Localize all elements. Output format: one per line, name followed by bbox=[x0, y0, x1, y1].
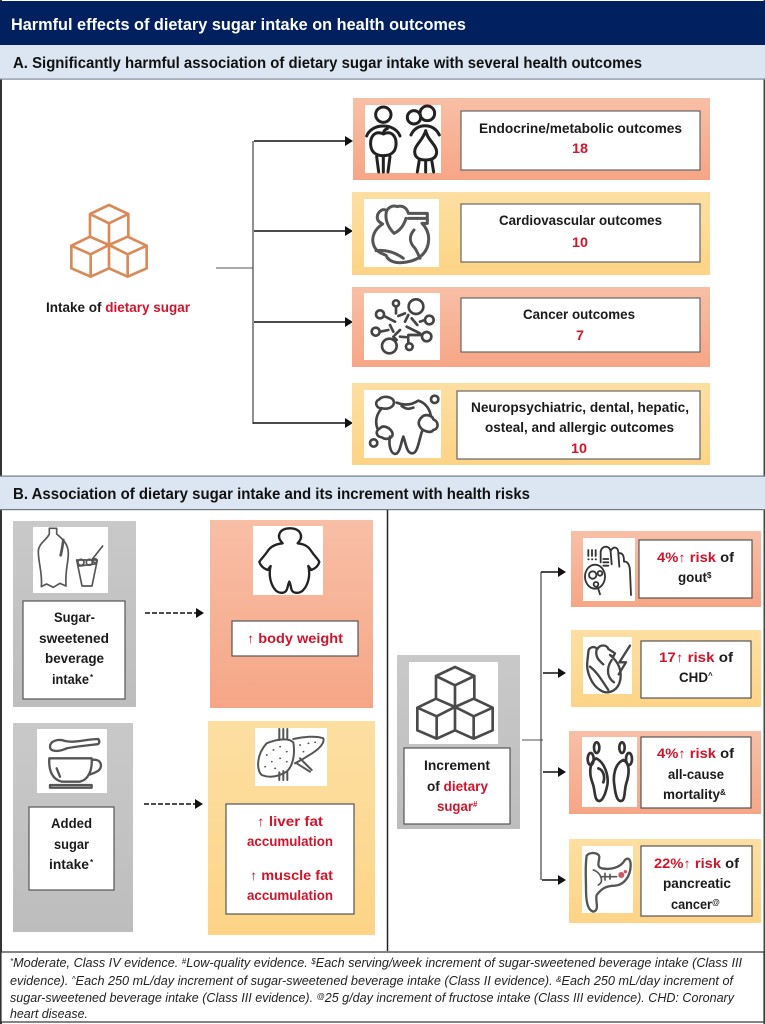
dashed arrow to body weight bbox=[145, 608, 204, 618]
icon: cup and spoon bbox=[49, 739, 101, 788]
footnote: 25 g/day increment of fructose intake (Class III evidence). CHD: Coronary bbox=[324, 991, 735, 1005]
label: 4%↑ risk of bbox=[657, 550, 735, 565]
label: cancer bbox=[671, 897, 713, 912]
label: mortality bbox=[663, 787, 720, 802]
icon: orange sugar cubes bbox=[71, 205, 147, 277]
footnote: sugar-sweetened beverage intake (Class III evidence). bbox=[10, 991, 312, 1005]
label: 4%↑ risk of bbox=[657, 746, 735, 761]
section A heading bbox=[0, 45, 765, 80]
icon: bottle and glass bbox=[38, 528, 103, 587]
label: ↑ muscle fat bbox=[250, 868, 334, 883]
label bbox=[424, 758, 491, 814]
footnote: Each 250 mL/day increment of bbox=[562, 974, 735, 988]
label: 22%↑ risk of bbox=[654, 856, 740, 871]
panel: sugar-sweetened beverage intake bbox=[13, 521, 136, 707]
panel: pancreatic cancer risk bbox=[569, 839, 761, 923]
label bbox=[471, 400, 689, 435]
footnote: Low-quality evidence. bbox=[186, 956, 311, 970]
label: Cardiovascular outcomes bbox=[499, 213, 662, 228]
label: $ bbox=[707, 571, 712, 580]
icon: grey sugar cubes bbox=[417, 667, 493, 739]
label: intake bbox=[49, 857, 89, 872]
label bbox=[247, 814, 334, 903]
section B heading: B. Association of dietary sugar intake and its increment with health risks bbox=[13, 486, 530, 503]
footnote: Each serving/week increment of sugar-sweetened beverage intake (Class III bbox=[316, 956, 743, 970]
label: pancreatic bbox=[663, 876, 731, 891]
footnote: ^ bbox=[72, 975, 76, 984]
label bbox=[654, 856, 740, 912]
label bbox=[657, 746, 735, 802]
icon: footprints bbox=[588, 742, 632, 801]
label: osteal, and allergic outcomes bbox=[485, 420, 674, 435]
label: & bbox=[720, 788, 726, 797]
label: beverage bbox=[45, 651, 104, 666]
label: # bbox=[473, 800, 478, 809]
count: 18 bbox=[572, 141, 589, 156]
label: @ bbox=[712, 898, 720, 907]
panel: endocrine/metabolic outcomes bbox=[353, 98, 710, 180]
label: * bbox=[90, 673, 94, 682]
label: intake bbox=[52, 672, 89, 687]
icon: heart bbox=[373, 206, 429, 263]
panel: body weight bbox=[210, 520, 373, 708]
label: ↑ liver fat bbox=[257, 814, 324, 829]
panel: all-cause mortality risk bbox=[569, 731, 761, 814]
label: 17↑ risk of bbox=[659, 650, 734, 665]
footnote: heart disease. bbox=[10, 1007, 88, 1021]
icon: apple and pear body shapes bbox=[367, 106, 439, 172]
dashed arrow to fat accumulation bbox=[144, 799, 203, 809]
count: 10 bbox=[572, 235, 588, 250]
footnote: $ bbox=[310, 957, 316, 966]
label: accumulation bbox=[247, 834, 333, 849]
label bbox=[39, 610, 109, 687]
footnote: evidence). bbox=[10, 974, 68, 988]
footnote: Each 250 mL/day increment of sugar-sweetened beverage intake (Class II evidence). bbox=[76, 974, 556, 988]
panel: increment of dietary sugar bbox=[397, 655, 520, 829]
label: all-cause bbox=[668, 767, 724, 782]
label: of dietary bbox=[427, 779, 488, 794]
title banner bbox=[0, 1, 765, 45]
intake of dietary sugar: Intake of dietary sugar bbox=[46, 300, 191, 315]
footnote: Moderate, Class IV evidence. bbox=[13, 956, 182, 970]
label: Neuropsychiatric, dental, hepatic, bbox=[471, 400, 689, 415]
intake of dietary sugar bbox=[46, 205, 191, 315]
label: sugar bbox=[437, 799, 474, 814]
footnote: * bbox=[10, 957, 14, 966]
label: accumulation bbox=[247, 888, 333, 903]
icon: pancreas with tumour bbox=[586, 853, 631, 912]
panel: gout risk bbox=[571, 531, 761, 607]
panel: cancer outcomes bbox=[352, 287, 710, 367]
tree connector with arrows A bbox=[216, 136, 353, 428]
label bbox=[659, 650, 734, 685]
label: Sugar- bbox=[54, 610, 95, 625]
label: Added bbox=[51, 816, 92, 831]
icon: liver bbox=[258, 729, 324, 780]
footnote: @ bbox=[317, 992, 325, 1001]
label: ↑ body weight bbox=[247, 631, 344, 646]
label: * bbox=[90, 858, 94, 867]
icon: cancer cells bbox=[372, 299, 434, 353]
panel: neuropsychiatric, dental, hepatic, osteal, allergic outcomes bbox=[352, 383, 710, 465]
label: CHD bbox=[679, 670, 708, 685]
footnote: # bbox=[182, 957, 187, 966]
icon: overweight person bbox=[259, 528, 319, 593]
count: 10 bbox=[571, 441, 587, 456]
label: sugar bbox=[54, 837, 90, 852]
label: Increment bbox=[424, 758, 491, 773]
label: Endocrine/metabolic outcomes bbox=[479, 121, 682, 136]
label: Cancer outcomes bbox=[523, 307, 635, 322]
label: sweetened bbox=[39, 631, 109, 646]
panel: CHD risk bbox=[571, 630, 761, 707]
icon: foot with gout bbox=[585, 547, 631, 595]
label: ^ bbox=[708, 671, 713, 680]
label bbox=[49, 816, 94, 872]
label: gout bbox=[678, 570, 707, 585]
icon: tooth bbox=[370, 396, 438, 454]
section B heading bbox=[0, 476, 765, 510]
icon: heart with lightning bbox=[587, 645, 630, 692]
tree connector with arrows B bbox=[522, 567, 566, 885]
title banner: Harmful effects of dietary sugar intake on health outcomes bbox=[11, 15, 466, 34]
footnote bbox=[1, 952, 764, 1022]
panel: added sugar intake bbox=[13, 723, 133, 932]
count: 7 bbox=[576, 328, 584, 343]
label bbox=[657, 550, 735, 585]
panel: cardiovascular outcomes bbox=[352, 192, 710, 275]
section A heading: A. Significantly harmful association of dietary sugar intake with several health outcomes bbox=[13, 55, 642, 72]
panel: liver and muscle fat bbox=[208, 721, 375, 935]
footnote: & bbox=[556, 975, 562, 984]
